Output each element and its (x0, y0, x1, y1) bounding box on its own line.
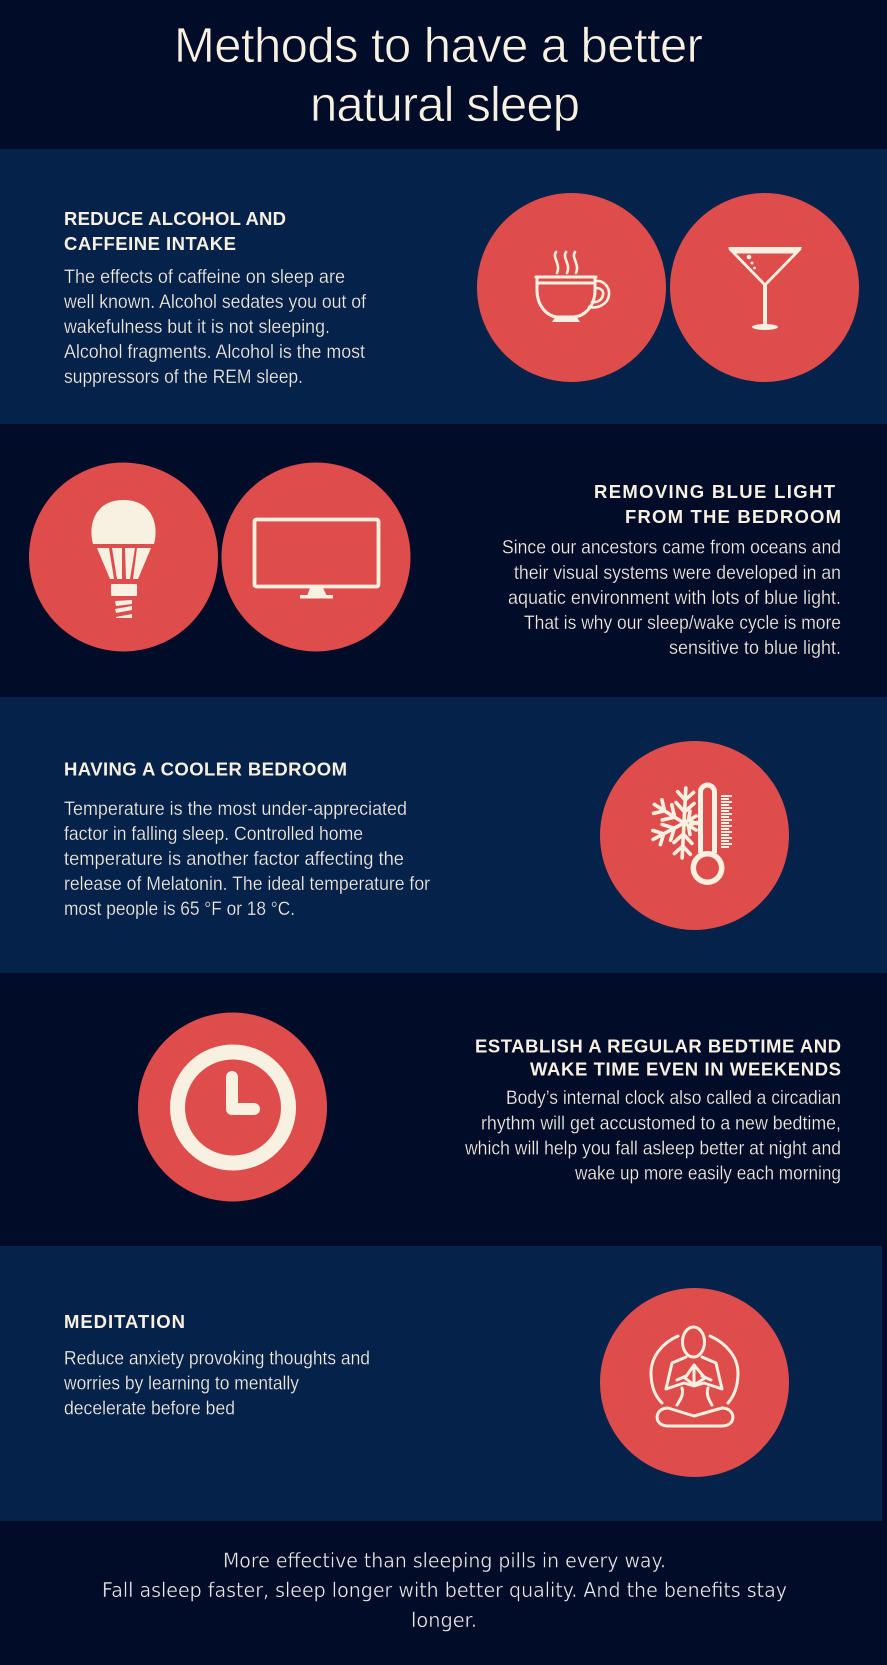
text block: meditation: Reduce anxiety provoking thoughts and (64, 1348, 370, 1370)
icon: light bulb (29, 462, 218, 652)
text block: blue light: aquatic environment with lots of blue light. (508, 587, 841, 609)
icon: coffee cup (477, 193, 666, 382)
heading: reduce alcohol and caffeine intake: CAFFEINE INTAKE (64, 233, 236, 254)
heading: removing blue light from the bedroom (594, 481, 841, 527)
heading: having a cooler bedroom: HAVING A COOLER BEDROOM (64, 758, 347, 780)
footer text: More effective than sleeping pills in every way. (223, 1548, 666, 1572)
text block: temperature: release of Melatonin. The ideal temperature for (64, 873, 430, 895)
heading: removing blue light from the bedroom: FROM THE BEDROOM (625, 506, 841, 527)
text block: blue light (502, 536, 841, 659)
text block: blue light: their visual systems were developed in an (514, 562, 841, 584)
text block: circadian rhythm: which will help you fall asleep better at night and (464, 1138, 841, 1160)
text block: circadian rhythm: wake up more easily each morning (574, 1162, 841, 1184)
text block: blue light: Since our ancestors came from oceans and (502, 536, 841, 558)
heading: establish a regular bedtime: WAKE TIME EVEN IN WEEKENDS (530, 1058, 841, 1080)
text block: circadian rhythm (464, 1087, 841, 1184)
text block: blue light: sensitive to blue light. (669, 637, 841, 659)
heading: removing blue light from the bedroom: REMOVING BLUE LIGHT (594, 481, 836, 502)
heading: reduce alcohol and caffeine intake (64, 208, 286, 254)
panel: regular bedtime (138, 1012, 841, 1202)
title: natural sleep (310, 78, 580, 132)
icon: cocktail glass (670, 193, 859, 382)
icon: monitor (222, 462, 410, 652)
text block: temperature: most people is 65 °F or 18 °C. (64, 898, 295, 920)
heading: establish a regular bedtime (475, 1036, 841, 1080)
text block: caffeine and alcohol: The effects of caffeine on sleep are (64, 266, 345, 288)
text block: caffeine and alcohol: Alcohol fragments. Alcohol is the most (64, 341, 366, 363)
text block: caffeine and alcohol (63, 266, 367, 388)
text block: blue light: That is why our sleep/wake cycle is more (524, 612, 841, 634)
heading: establish a regular bedtime: ESTABLISH A REGULAR BEDTIME AND (475, 1036, 841, 1056)
text block: meditation (63, 1348, 370, 1420)
icon: clock (138, 1012, 327, 1202)
footer text: Fall asleep faster, sleep longer with better quality. And the benefits stay (102, 1578, 787, 1602)
text block: meditation: decelerate before bed (64, 1398, 235, 1420)
text block: caffeine and alcohol: suppressors of the REM sleep. (64, 366, 303, 388)
text block: temperature: Temperature is the most under-appreciated (64, 798, 407, 820)
text block: meditation: worries by learning to mentally (63, 1372, 299, 1394)
footer text: longer. (411, 1608, 477, 1632)
heading: reduce alcohol and caffeine intake: REDUCE ALCOHOL AND (64, 208, 286, 229)
panel: reduce alcohol and caffeine (0, 149, 887, 424)
title: Methods to have a better (174, 19, 703, 73)
icon: snowflake and thermometer (600, 741, 789, 930)
panel: cooler bedroom (0, 697, 887, 973)
text block: circadian rhythm: rhythm will get accustomed to a new bedtime, (481, 1112, 841, 1134)
title (174, 19, 703, 132)
footer text (102, 1548, 787, 1632)
text block: caffeine and alcohol: well known. Alcohol sedates you out of (63, 291, 367, 313)
panel: removing blue light (29, 462, 841, 659)
text block: temperature: temperature is another factor affecting the (64, 848, 404, 870)
panel: meditation (0, 1246, 882, 1521)
text block: temperature (64, 798, 430, 920)
text block: circadian rhythm: Body’s internal clock also called a circadian (506, 1087, 841, 1109)
text block: caffeine and alcohol: wakefulness but it is not sleeping. (63, 316, 330, 338)
text block: temperature: factor in falling sleep. Controlled home (64, 823, 363, 845)
heading: meditation: MEDITATION (64, 1311, 185, 1332)
icon: meditating figure (600, 1288, 789, 1477)
